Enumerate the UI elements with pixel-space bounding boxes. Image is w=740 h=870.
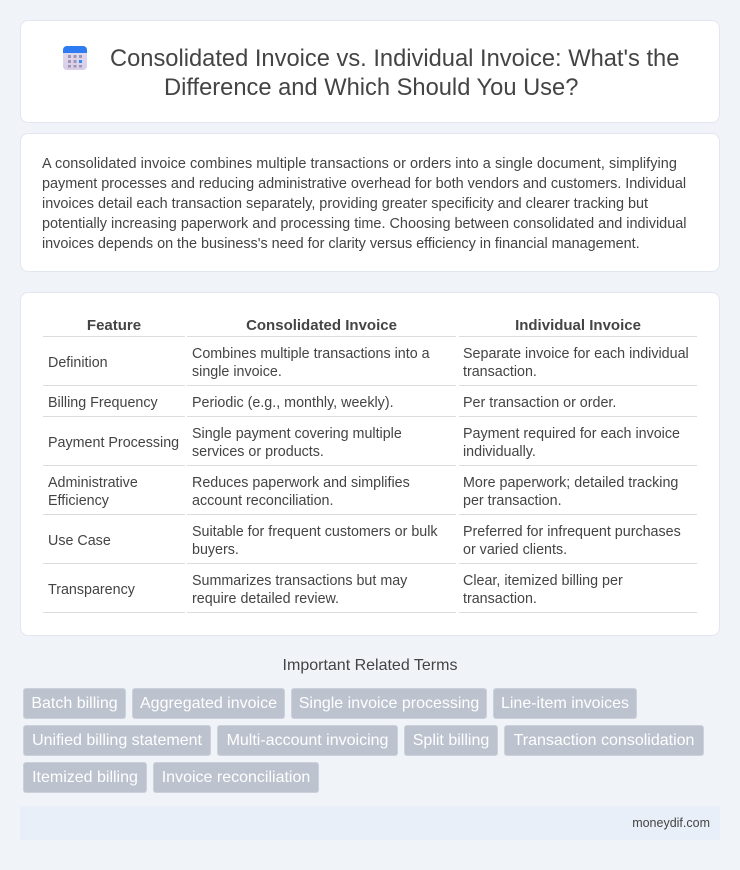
row: payment processing: Payment Processing — [48, 434, 179, 450]
row: administrative efficiency: per transaction. — [463, 492, 562, 508]
tag — [23, 762, 147, 793]
row: administrative efficiency: Reduces paperwork and simplifies — [192, 474, 410, 490]
row: administrative efficiency — [48, 474, 678, 508]
row: payment processing — [48, 426, 680, 460]
row: billing frequency: Per transaction or order. — [463, 395, 616, 411]
column headers: Consolidated Invoice — [246, 317, 397, 334]
row: definition: single invoice. — [192, 364, 282, 380]
row: billing frequency: Periodic (e.g., monthly, weekly). — [192, 395, 394, 411]
row: transparency: Summarizes transactions but may — [192, 572, 407, 588]
row: use case: buyers. — [192, 542, 239, 558]
row: payment processing: Single payment covering multiple — [192, 426, 402, 442]
row: definition: Separate invoice for each individual — [463, 346, 689, 362]
tag: Line-item invoices — [501, 695, 629, 712]
row: administrative efficiency: Administrative — [48, 474, 138, 490]
icon: calendar — [63, 46, 87, 70]
tag — [217, 725, 398, 756]
title: Difference and Which Should You Use? — [164, 74, 578, 100]
intro text: A consolidated invoice combines multiple transactions or orders into a single document, simplifying — [42, 156, 677, 172]
tag — [404, 725, 498, 756]
column headers — [87, 317, 641, 334]
row: administrative efficiency: Efficiency — [48, 492, 109, 508]
row: transparency: transaction. — [463, 590, 537, 606]
tag: Invoice reconciliation — [162, 769, 310, 786]
column headers: Individual Invoice — [515, 317, 641, 334]
intro text: invoices depends on the business's need for clarity versus efficiency in financial management. — [42, 236, 640, 252]
footer bar — [20, 806, 720, 840]
title — [110, 46, 679, 100]
row: definition: Definition — [48, 354, 108, 370]
tag: Aggregated invoice — [140, 695, 277, 712]
tag — [504, 725, 704, 756]
related terms heading: Important Related Terms — [283, 657, 457, 674]
row: administrative efficiency: account reconciliation. — [192, 492, 333, 508]
tag — [23, 688, 126, 719]
tag — [153, 762, 319, 793]
row: administrative efficiency: More paperwork; detailed tracking — [463, 474, 678, 490]
tag: Split billing — [413, 732, 489, 749]
intro text — [42, 156, 686, 252]
row: transparency: Transparency — [48, 582, 135, 598]
table card — [20, 292, 720, 636]
tag — [291, 688, 487, 719]
tag: Transaction consolidation — [514, 732, 694, 749]
row: definition: Combines multiple transactions into a — [192, 346, 430, 362]
row: transparency: require detailed review. — [192, 590, 339, 606]
row: transparency: Clear, itemized billing per — [463, 572, 623, 588]
tag: Single invoice processing — [299, 695, 479, 712]
row: payment processing: Payment required for each invoice — [463, 426, 680, 442]
column headers: Feature — [87, 317, 141, 334]
row: billing frequency: Billing Frequency — [48, 395, 158, 411]
row: transparency — [48, 572, 623, 606]
related term tags — [23, 688, 704, 793]
header card — [20, 20, 720, 123]
tag: Batch billing — [31, 695, 118, 712]
row: definition: transaction. — [463, 364, 537, 380]
tag: Multi-account invoicing — [227, 732, 388, 749]
tag — [132, 688, 285, 719]
row: payment processing: individually. — [463, 444, 536, 460]
tag — [493, 688, 637, 719]
tag: Unified billing statement — [32, 732, 202, 749]
row: use case: Use Case — [48, 532, 111, 548]
row: use case — [48, 524, 681, 558]
row: definition — [48, 346, 689, 380]
intro text: potentially increasing paperwork and processing time. Choosing between consolidated and individual — [42, 216, 686, 232]
row: use case: Preferred for infrequent purchases — [463, 524, 681, 540]
footer source: moneydif.com — [632, 816, 710, 830]
tag: Itemized billing — [32, 769, 138, 786]
title: Consolidated Invoice vs. Individual Invoice: What's the — [110, 46, 679, 72]
row: use case: Suitable for frequent customers or bulk — [192, 524, 438, 540]
row: billing frequency — [48, 395, 616, 411]
intro card — [20, 133, 720, 272]
row: payment processing: services or products. — [192, 444, 324, 460]
intro text: payment processes and reducing administrative overhead for both vendors and customers. Individual — [42, 176, 686, 192]
tag — [23, 725, 211, 756]
intro text: invoices detail each transaction separately, providing greater specificity and clearer tracking but — [42, 196, 648, 212]
row: use case: or varied clients. — [463, 542, 567, 558]
